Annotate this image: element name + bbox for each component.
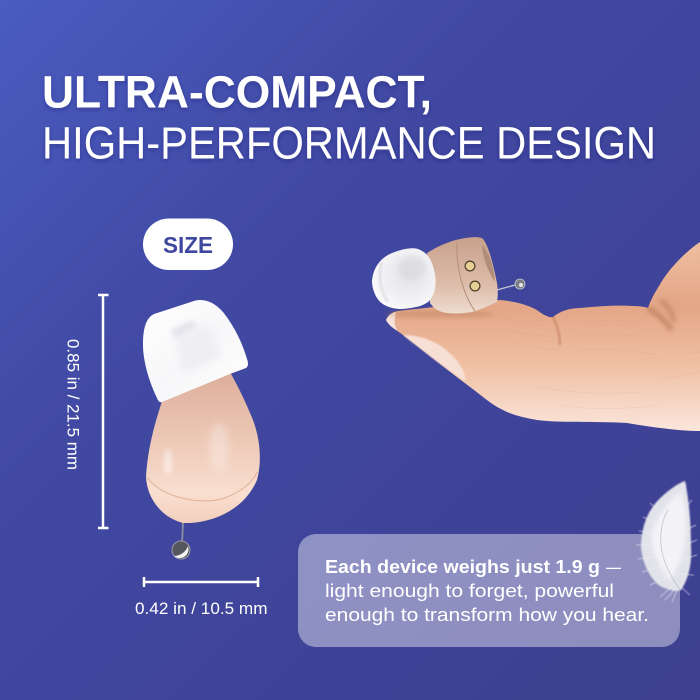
device shadow on thumb	[385, 310, 495, 318]
device shell	[427, 237, 498, 314]
product photo: thumb holding hearing aid	[372, 237, 700, 431]
knuckle crease	[553, 317, 560, 345]
title: ULTRA-COMPACT,	[42, 66, 432, 118]
info panel	[298, 534, 680, 647]
hearing aid wire	[182, 522, 183, 545]
height dimension line	[98, 295, 108, 528]
thumbnail	[403, 335, 465, 381]
size badge: SIZE	[163, 232, 213, 258]
body seam	[147, 472, 257, 501]
silicone dome	[143, 300, 248, 402]
thumb	[386, 242, 700, 431]
device silicone dome	[372, 248, 436, 309]
panel text	[325, 556, 649, 625]
hearing aid body	[146, 372, 260, 523]
size badge	[143, 218, 233, 270]
gold contacts	[464, 260, 480, 292]
panel text: —	[606, 556, 621, 577]
title: HIGH-PERFORMANCE DESIGN	[42, 118, 656, 168]
height label: 0.85 in / 21.5 mm	[64, 339, 82, 470]
device wire	[497, 285, 515, 290]
hearing aid pull ball	[172, 541, 190, 559]
panel text: Each device weighs just 1.9 g	[325, 556, 600, 577]
width dimension line	[144, 577, 258, 587]
product illustration: hearing aid side view	[143, 300, 260, 559]
thumb base crease	[648, 308, 672, 330]
thumbnail edge	[386, 312, 398, 331]
panel text: enough to transform how you hear.	[325, 604, 649, 625]
panel text: light enough to forget, powerful	[325, 580, 614, 601]
shell seam	[457, 243, 475, 311]
title	[42, 66, 656, 168]
skin wrinkles	[500, 318, 700, 409]
width label: 0.42 in / 10.5 mm	[135, 600, 268, 618]
shell faceplate	[482, 245, 495, 282]
device pull ball	[515, 279, 525, 289]
feather icon	[636, 481, 697, 602]
